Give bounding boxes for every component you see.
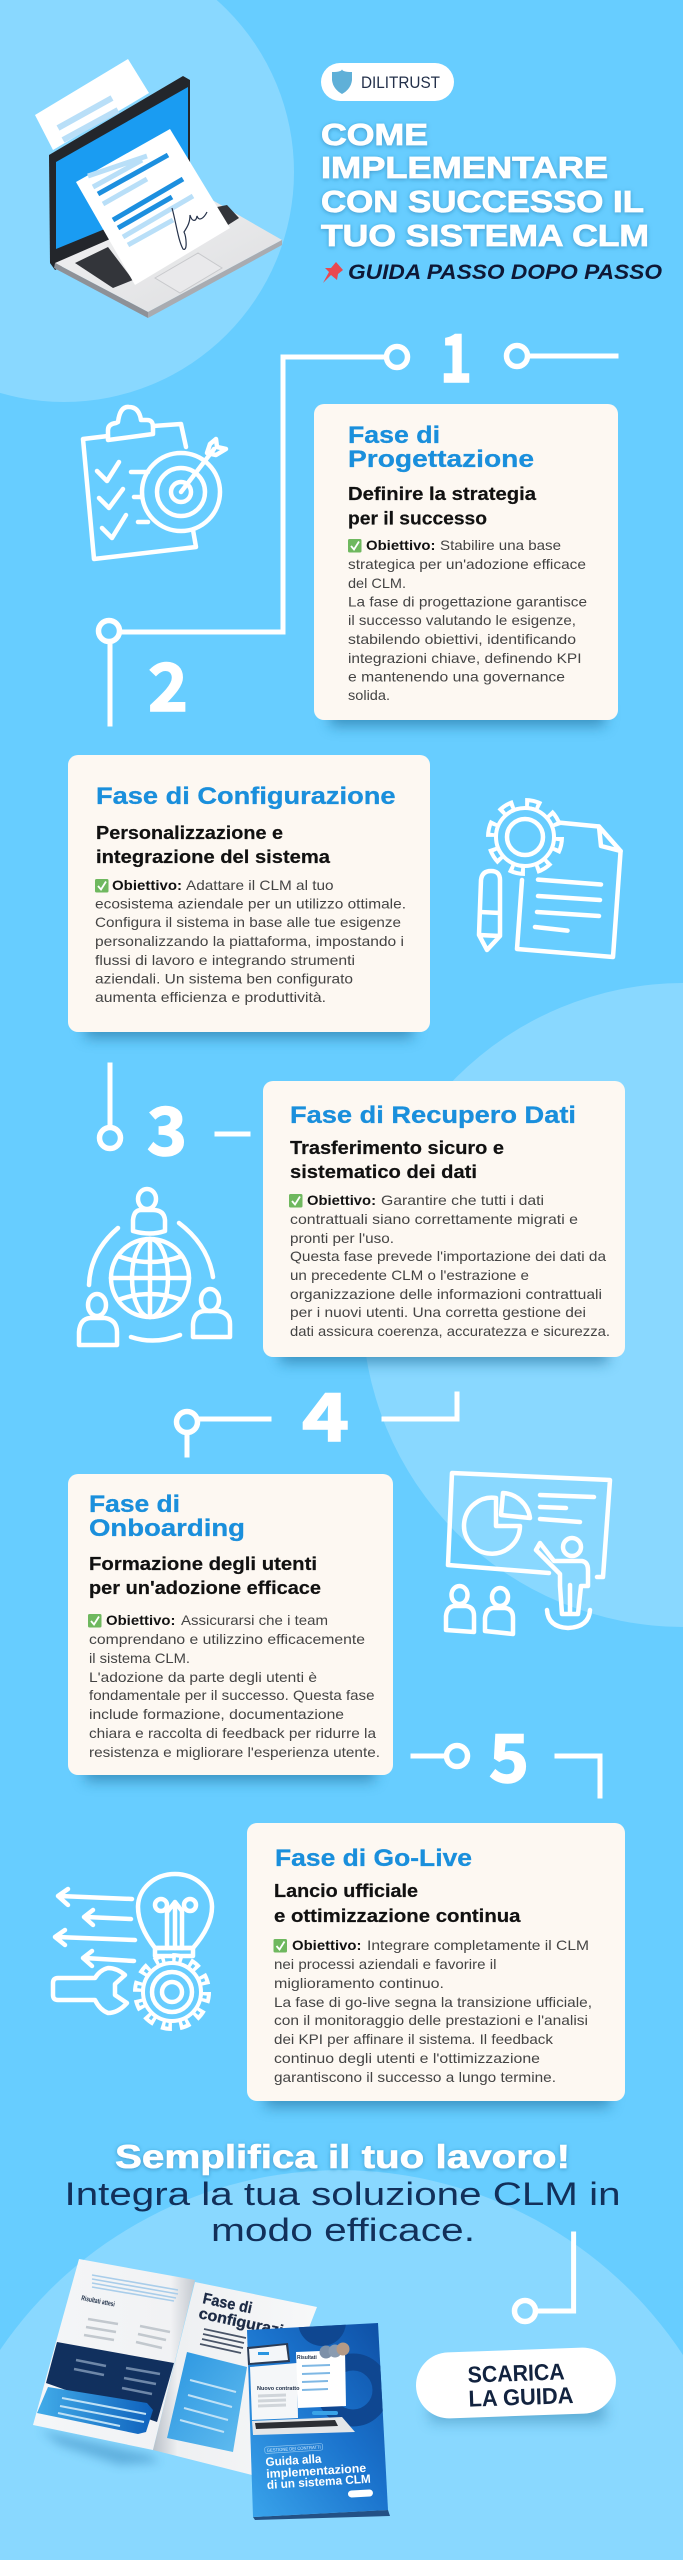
title: TUO SISTEMA CLM: [321, 218, 649, 253]
body text: aumenta efficienza e produttività.: [95, 989, 326, 1005]
subheading: integrazione del sistema: [96, 847, 331, 867]
brochure cover: Nuovo contratto: [257, 2386, 300, 2392]
body text: Configura il sistema in base alle tue esigenze: [95, 914, 401, 930]
body text: dati assicura coerenza, accuratezza e sicurezza.: [290, 1323, 610, 1339]
title: COME: [321, 117, 428, 152]
heading: Fase di: [89, 1491, 180, 1518]
brochure left page: Risultati attesi: [81, 2295, 115, 2308]
subtitle with pin icon: GUIDA PASSO DOPO PASSO: [348, 261, 662, 284]
body text: Obiettivo:: [112, 877, 182, 893]
body text: Garantire che tutti i dati: [381, 1192, 544, 1208]
subheading: per il successo: [348, 508, 487, 528]
subheading: Formazione degli utenti: [89, 1554, 317, 1574]
call to action button: SCARICA: [467, 2358, 565, 2388]
subheading: [348, 484, 537, 528]
brochure cover: di un sistema CLM: [266, 2472, 371, 2492]
body text: Stabilire una base: [440, 537, 561, 553]
icon: check: [289, 1194, 302, 1208]
body text: un precedente CLM o l'estrazione e: [290, 1267, 529, 1283]
body text: aziendali. Un sistema ben configurato: [95, 971, 353, 987]
heading: Progettazione: [348, 446, 534, 473]
icon: check: [348, 539, 362, 552]
icon: red pin: [323, 262, 343, 283]
heading: Fase di: [348, 422, 440, 449]
body text: Obiettivo:: [106, 1612, 176, 1628]
subheading: Definire la strategia: [348, 484, 537, 504]
body text: [95, 877, 406, 1005]
body text: chiara e raccolta di feedback per ridurre la: [89, 1725, 376, 1741]
body text: resistenza e migliorare l'esperienza utente.: [89, 1744, 380, 1760]
heading: [89, 1491, 245, 1542]
body text: comprendano e utilizzino efficacemente: [89, 1631, 365, 1647]
closing headline: Semplifica il tuo lavoro!: [115, 2138, 570, 2175]
brochure right page: Fase di: [201, 2290, 254, 2317]
body text: [348, 537, 587, 703]
body text: La fase di progettazione garantisce: [348, 594, 587, 610]
body text: flussi di lavoro e integrando strumenti: [95, 952, 355, 968]
illustration: open guide brochure: [33, 2259, 390, 2520]
brochure cover: Risultati: [297, 2355, 317, 2361]
heading: Onboarding: [89, 1515, 245, 1542]
title: CON SUCCESSO IL: [321, 184, 644, 219]
background circle: top left: [0, 0, 294, 402]
step 4 number and connector: [176, 1365, 457, 1461]
panel: fase di onboarding: [68, 1474, 393, 1781]
closing headline: [64, 2138, 620, 2248]
icon: check: [88, 1614, 102, 1628]
body text: miglioramento continuo.: [274, 1975, 444, 1991]
step 2 number and connector: 2: [148, 635, 188, 731]
body text: [274, 1937, 592, 2085]
subheading: [96, 823, 331, 867]
body text: Obiettivo:: [307, 1192, 376, 1208]
panel: fase di recupero dati: [263, 1081, 625, 1363]
body text: continuo degli utenti e l'ottimizzazione: [274, 2050, 540, 2066]
panel: fase di configurazione: [68, 755, 430, 1038]
body text: il sistema CLM.: [89, 1650, 190, 1666]
subheading: e ottimizzazione continua: [274, 1906, 522, 1926]
brochure right page: configurazi: [197, 2305, 285, 2340]
step 2 number and connector: [98, 620, 188, 731]
subheading: per un'adozione efficace: [89, 1578, 321, 1598]
logo: DiliTrust badge: DILITRUST: [361, 73, 440, 92]
body text: Assicurarsi che i team: [181, 1612, 328, 1628]
panel: fase di progettazione: [314, 404, 618, 726]
body text: nei processi aziendali e favorire il: [274, 1956, 496, 1972]
subheading: [290, 1138, 504, 1182]
icon: shield: [332, 69, 352, 94]
subheading: sistematico dei dati: [290, 1162, 477, 1182]
heading: [348, 422, 534, 473]
body text: ecosistema aziendale per un utilizzo ottimale.: [95, 896, 406, 912]
subheading: [274, 1881, 522, 1926]
body text: Integrare completamente il CLM: [367, 1937, 589, 1953]
brochure cover: Guida alla: [265, 2452, 322, 2469]
icon: globe with people: [79, 1189, 230, 1345]
icon: check: [95, 879, 108, 892]
step 4 number and connector: 4: [302, 1365, 349, 1461]
body text: strategica per un'adozione efficace: [348, 556, 586, 572]
body text: pronti per l'uso.: [290, 1230, 394, 1246]
brochure cover: implementazione: [266, 2461, 367, 2481]
closing headline: Integra la tua soluzione CLM in: [64, 2176, 620, 2212]
body text: Obiettivo:: [366, 537, 436, 553]
brochure right page: [153, 2282, 317, 2475]
body text: contrattuali siano correttamente migrati e: [290, 1211, 578, 1227]
body text: garantiscono il successo a lungo termine.: [274, 2069, 556, 2085]
brochure left page: [33, 2259, 195, 2450]
step 1 number and connector: [122, 306, 616, 632]
body text: con il monitoraggio delle prestazioni e l'analisi: [274, 2012, 588, 2028]
body text: Adattare il CLM al tuo: [186, 877, 334, 893]
subheading: Lancio ufficiale: [274, 1881, 418, 1901]
body text: Obiettivo:: [292, 1937, 362, 1953]
body text: solida.: [348, 687, 390, 703]
background circle: middle right: [362, 983, 683, 1627]
body text: L'adozione da parte degli utenti è: [89, 1669, 317, 1685]
heading: Fase di Configurazione: [96, 783, 396, 810]
title: [321, 117, 649, 253]
brochure cover: [247, 2323, 390, 2520]
body text: e mantenendo una governance: [348, 669, 565, 685]
step 3 number and connector: 3: [147, 1079, 187, 1175]
body text: La fase di go-live segna la transizione ufficiale,: [274, 1994, 592, 2010]
body text: Questa fase prevede l'importazione dei dati da: [290, 1248, 606, 1264]
heading: Fase di Go-Live: [275, 1845, 472, 1872]
icon: gear, document and pencil: [479, 804, 621, 957]
panel: fase di go-live: [247, 1823, 625, 2107]
body text: stabilendo obiettivi, identificando: [348, 631, 576, 647]
body text: include formazione, documentazione: [89, 1706, 344, 1722]
logo: DiliTrust badge: [321, 63, 454, 101]
heading: Fase di Recupero Dati: [290, 1102, 576, 1129]
brochure cover: GESTIONE DEI CONTRATTI: [267, 2445, 321, 2453]
step 3 number and connector: [100, 1065, 248, 1175]
icon: light bulb, gear, wrench and arrows: [53, 1874, 212, 2025]
subheading: Trasferimento sicuro e: [290, 1138, 504, 1158]
subheading: [89, 1554, 321, 1598]
closing headline: modo efficace.: [211, 2212, 475, 2248]
icon: check: [274, 1939, 287, 1952]
body text: personalizzando la piattaforma, impostando i: [95, 933, 404, 949]
background circle: bottom: [0, 2170, 683, 2560]
connector to button: [514, 2234, 574, 2322]
body text: organizzazione delle informazioni contrattuali: [290, 1286, 602, 1302]
illustration: laptop with signed contract: [35, 59, 282, 318]
title: IMPLEMENTARE: [321, 150, 608, 185]
body text: [290, 1192, 610, 1339]
body text: il successo valutando le esigenze,: [348, 612, 576, 628]
subheading: Personalizzazione e: [96, 823, 283, 843]
call to action button: LA GUIDA: [468, 2382, 574, 2412]
body text: fondamentale per il successo. Questa fase: [89, 1687, 375, 1703]
step 5 number and connector: [413, 1706, 600, 1802]
body text: [89, 1612, 380, 1760]
step 5 number and connector: 5: [489, 1706, 529, 1802]
call to action button: [415, 2347, 617, 2422]
step 1 number and connector: 1: [440, 306, 472, 402]
icon: clipboard and target: [83, 407, 226, 559]
icon: presentation board and audience: [446, 1473, 610, 1634]
body text: integrazioni chiave, definendo KPI: [348, 650, 582, 666]
body text: del CLM.: [348, 575, 406, 591]
body text: per i nuovi utenti. Una corretta gestione dei: [290, 1304, 586, 1320]
body text: dei KPI per affinare il sistema. Il feedback: [274, 2031, 554, 2047]
